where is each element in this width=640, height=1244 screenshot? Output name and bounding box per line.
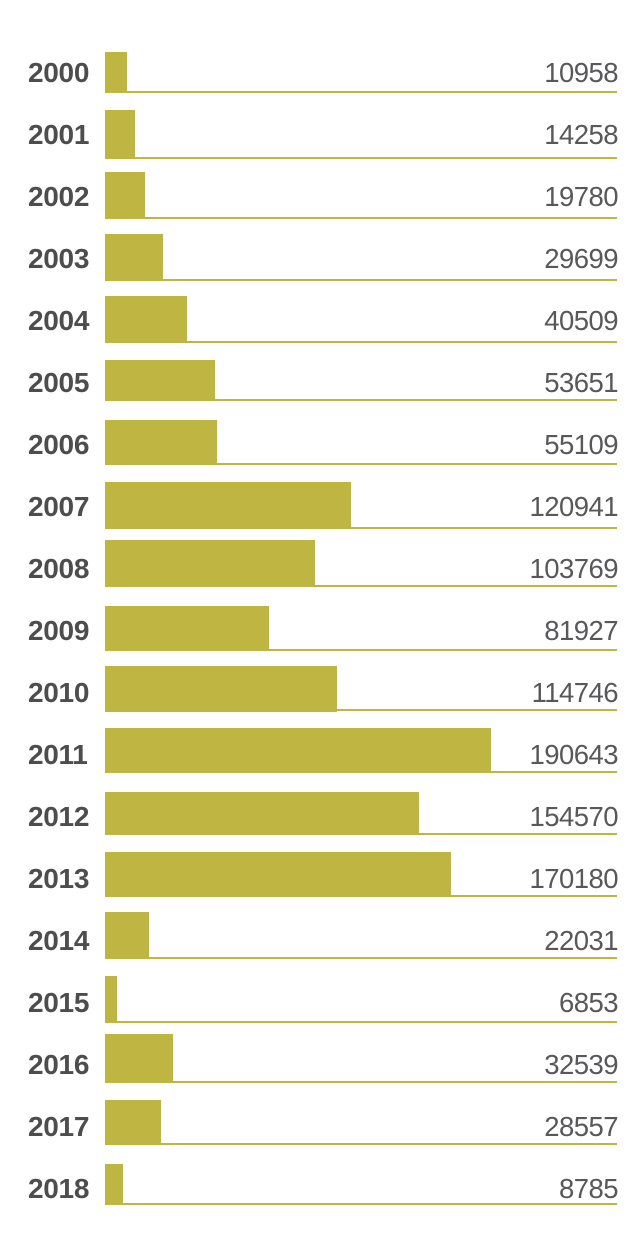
row 2014: 22031	[544, 925, 618, 956]
row 2007: 2007	[28, 491, 89, 522]
row 2015: 2015	[28, 987, 89, 1018]
row 2011: 190643	[530, 739, 618, 770]
row 2013: 170180	[530, 863, 618, 894]
row 2001: 2001	[28, 119, 89, 150]
row 2012: 2012	[28, 801, 89, 832]
row 2017: 2017	[28, 1111, 89, 1142]
row 2001: 14258	[544, 119, 618, 150]
row 2013	[28, 852, 618, 897]
row 2012: 154570	[530, 801, 618, 832]
row 2006: 55109	[544, 429, 618, 460]
row 2016: 32539	[544, 1049, 618, 1080]
row 2008: 2008	[28, 553, 89, 584]
row 2017	[28, 1100, 618, 1145]
row 2008	[28, 540, 618, 587]
row 2006: 2006	[28, 429, 89, 460]
row 2004: 2004	[28, 305, 90, 336]
row 2002	[28, 172, 618, 219]
row 2018	[28, 1164, 618, 1205]
row 2004: 40509	[544, 305, 618, 336]
row 2000	[28, 52, 618, 93]
row 2004	[28, 296, 618, 343]
row 2001	[28, 110, 618, 159]
row 2002: 2002	[28, 181, 89, 212]
row 2009: 81927	[544, 615, 618, 646]
row 2016: 2016	[28, 1049, 89, 1080]
row 2010: 2010	[28, 677, 89, 708]
row 2009: 2009	[28, 615, 89, 646]
row 2014: 2014	[28, 925, 90, 956]
row 2003: 29699	[544, 243, 618, 274]
row 2005	[28, 360, 618, 401]
row 2006	[28, 420, 618, 465]
row 2005: 2005	[28, 367, 89, 398]
row 2002: 19780	[544, 181, 618, 212]
row 2014	[28, 912, 618, 959]
row 2011: 2011	[28, 739, 88, 770]
row 2010: 114746	[532, 677, 618, 708]
row 2012	[28, 792, 618, 835]
row 2015: 6853	[559, 987, 618, 1018]
row 2016	[28, 1034, 618, 1083]
row 2013: 2013	[28, 863, 89, 894]
row 2008: 103769	[530, 553, 618, 584]
row 2000: 2000	[28, 57, 89, 88]
row 2015	[28, 976, 618, 1023]
row 2003: 2003	[28, 243, 89, 274]
row 2018: 2018	[28, 1173, 89, 1204]
row 2011	[28, 728, 618, 773]
row 2009	[28, 606, 618, 651]
row 2000: 10958	[544, 57, 618, 88]
row 2007: 120941	[530, 491, 618, 522]
row 2007	[28, 482, 618, 529]
row 2003	[28, 234, 618, 281]
row 2005: 53651	[544, 367, 618, 398]
row 2017: 28557	[544, 1111, 618, 1142]
row 2018: 8785	[559, 1173, 618, 1204]
row 2010	[28, 666, 618, 712]
